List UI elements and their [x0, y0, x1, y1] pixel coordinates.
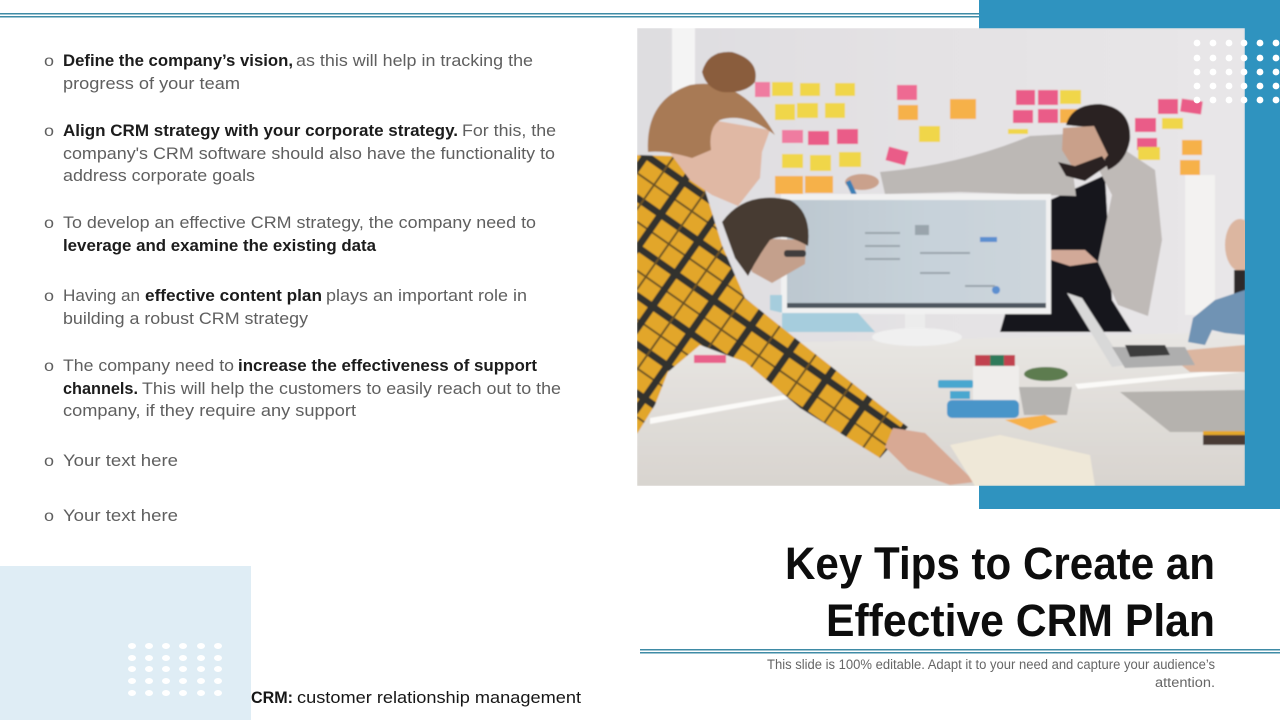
bullet 2: o: [44, 123, 54, 140]
bullet 6: Your text here: [63, 451, 178, 470]
bullet 1: as this will help in tracking the: [296, 51, 533, 70]
bullet 4: effective content plan: [145, 286, 322, 305]
bullet 5: The company need to: [63, 356, 234, 375]
bullet 1: [44, 51, 533, 93]
bullet 3: o: [44, 215, 54, 232]
presenter: [845, 104, 1162, 332]
bullet 4: plays an important role in: [326, 286, 527, 305]
desk items: cup, plant, eraser and notes: [694, 355, 1072, 430]
bullet 2: company's CRM software should also have the functionality to: [63, 144, 555, 163]
title: Effective CRM Plan: [826, 595, 1215, 646]
subtitle: [767, 657, 1215, 690]
title: [785, 538, 1215, 646]
window light: [672, 28, 1215, 315]
bullet 4: Having an: [63, 286, 140, 305]
title: Key Tips to Create an: [785, 538, 1215, 589]
footnote: CRM:: [251, 688, 293, 707]
footnote: customer relationship management: [297, 688, 581, 707]
bullet list: [44, 51, 561, 525]
paper stack: [950, 435, 1095, 486]
bullet 2: For this, the: [462, 121, 556, 140]
bullet 6: o: [44, 453, 54, 470]
sticky notes: [755, 82, 1203, 194]
bullet 2: Align CRM strategy with your corporate strategy.: [63, 121, 458, 140]
bullet 1: Define the company’s vision,: [63, 51, 293, 70]
photo: team reviewing a CRM dashboard: [637, 28, 1255, 486]
bullet 5: company, if they require any support: [63, 401, 356, 420]
dots: top right: [1194, 40, 1279, 103]
light blue corner panel: [0, 566, 251, 720]
bullet 5: increase the effectiveness of support: [238, 356, 537, 375]
title double rule: [640, 649, 1280, 654]
bullet 5: channels.: [63, 379, 138, 398]
subtitle: This slide is 100% editable. Adapt it to your need and capture your audience’s: [767, 657, 1215, 672]
subtitle: attention.: [1155, 675, 1215, 690]
bullet 5: [44, 356, 561, 420]
closed laptop: [1120, 390, 1245, 445]
bullet 4: building a robust CRM strategy: [63, 309, 309, 328]
bullet 1: progress of your team: [63, 74, 240, 93]
top double rule: [0, 13, 979, 18]
bullet 1: o: [44, 53, 54, 70]
table reflections: [650, 368, 1245, 424]
bullet 3: To develop an effective CRM strategy, the company need to: [63, 213, 536, 232]
standing woman in plaid shirt: [637, 52, 975, 485]
bullet 7: o: [44, 508, 54, 525]
bullet 4: [44, 286, 527, 328]
open laptop: [1067, 293, 1195, 368]
bullet 5: This will help the customers to easily reach out to the: [142, 379, 561, 398]
bullet 5: o: [44, 358, 54, 375]
dots: bottom left: [128, 643, 222, 696]
office wall: [637, 28, 1245, 348]
blue accent panel behind photo: [979, 0, 1280, 509]
bullet 4: o: [44, 288, 54, 305]
bullet 3: [44, 213, 536, 255]
bullet 7: Your text here: [63, 506, 178, 525]
seated man in glasses: [722, 198, 809, 283]
monitor: [770, 194, 1051, 346]
bullet 2: [44, 121, 556, 185]
table: [637, 332, 1245, 486]
bullet 2: address corporate goals: [63, 166, 255, 185]
bullet 3: leverage and examine the existing data: [63, 236, 377, 255]
right seated person: [1182, 218, 1245, 373]
